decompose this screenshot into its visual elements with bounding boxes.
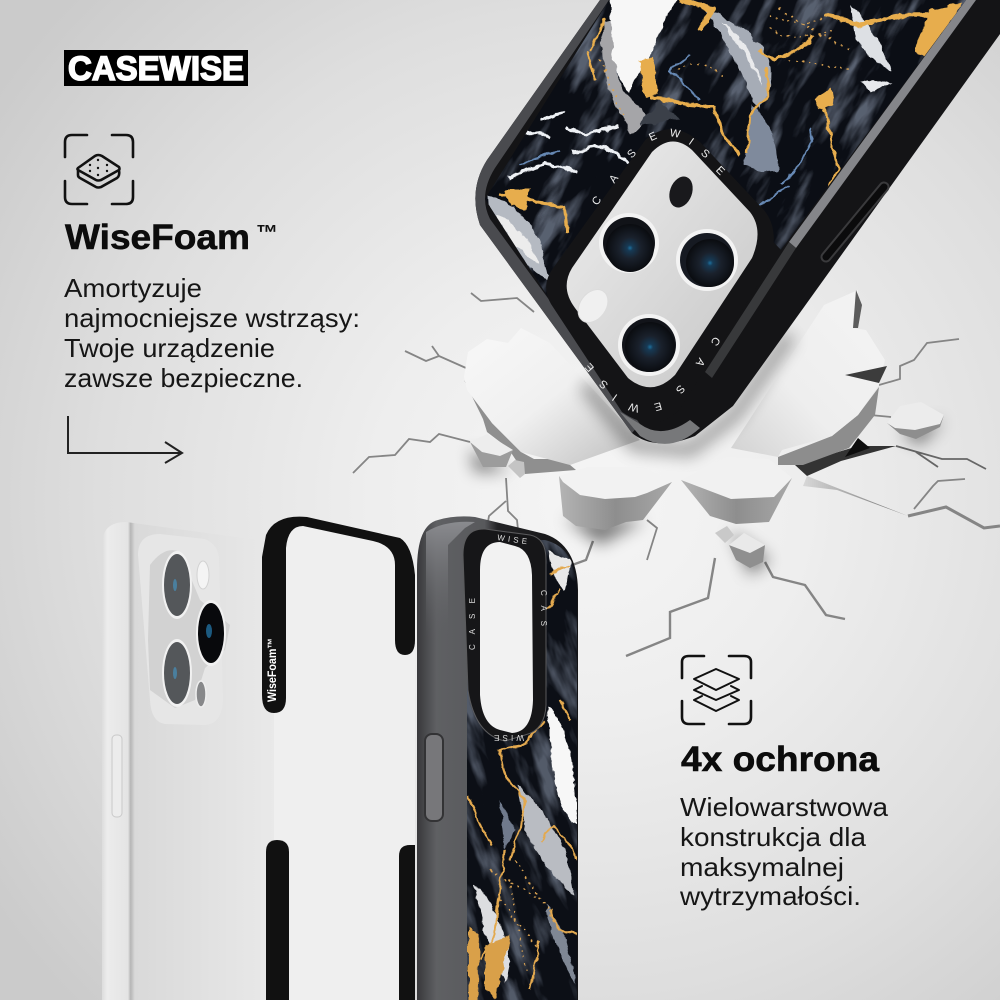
heading: 4x ochrona: 4x ochrona xyxy=(681,740,880,779)
text: 4x ochrona description: Wielowarstwowa xyxy=(680,792,889,822)
island brand text: C xyxy=(590,194,604,208)
white phone xyxy=(102,522,275,1000)
island brand text: I xyxy=(610,391,620,403)
island brand text: E xyxy=(653,399,663,413)
text: WiseFoam description xyxy=(64,273,360,393)
slab: left large xyxy=(464,328,640,474)
icon: layers in scan frame xyxy=(682,656,751,724)
strip label: WiseFoam™ xyxy=(265,638,279,702)
marble back xyxy=(485,0,966,295)
small debris xyxy=(715,526,765,568)
ring brand text: C A S E xyxy=(468,598,477,650)
island brand text: E xyxy=(713,164,727,178)
island brand text: A xyxy=(607,172,621,186)
camera plate xyxy=(138,534,223,725)
icon: foam pad in scan frame xyxy=(65,135,133,204)
transparent inner shell xyxy=(274,526,415,1000)
phone: impact phone in marble case xyxy=(475,0,1000,444)
island brand text: E xyxy=(583,360,597,374)
text: 4x ochrona description: konstrukcja dla xyxy=(680,822,867,852)
island brand text: S xyxy=(625,147,639,161)
heading: WiseFoam: ™ xyxy=(256,220,278,245)
marble back xyxy=(467,540,577,1000)
island brand text: W xyxy=(669,127,682,141)
case body xyxy=(475,0,1000,443)
lenses xyxy=(148,550,230,708)
foam strip lower left xyxy=(266,840,289,1000)
text: 4x ochrona description: wytrzymałości. xyxy=(679,881,861,911)
lenses xyxy=(572,173,738,376)
dark case side view xyxy=(417,516,578,1000)
logo: CASEWISE xyxy=(68,50,244,88)
camera plate xyxy=(567,141,758,387)
metal side highlight xyxy=(789,0,976,248)
WiseFoam foam strip xyxy=(262,517,415,713)
island brand text: W xyxy=(627,400,641,414)
slab: small right rock xyxy=(887,402,944,439)
island brand text: I xyxy=(686,136,696,148)
crack lines xyxy=(353,293,1000,656)
ring brand text: C A S xyxy=(539,590,548,626)
slab: small left rocks xyxy=(470,434,525,478)
slab: center left xyxy=(559,467,672,530)
heading: WiseFoam: WiseFoam xyxy=(65,218,250,257)
text: 4x ochrona description: maksymalnej xyxy=(680,852,844,882)
slab: right large xyxy=(731,290,908,516)
contact shadow xyxy=(585,335,790,450)
island brand text: S xyxy=(673,382,687,396)
text: WiseFoam description: Amortyzuje xyxy=(64,273,202,303)
ring brand text: W I S E xyxy=(497,533,528,546)
cracked wall impact xyxy=(353,290,1000,656)
slab: center right xyxy=(681,457,792,524)
island brand text: E xyxy=(647,130,659,144)
text: WiseFoam description: Twoje urządzenie xyxy=(64,333,275,363)
text: 4x ochrona description xyxy=(679,792,889,911)
ground shadows xyxy=(470,420,944,575)
island brand text: A xyxy=(693,356,707,369)
ring brand text xyxy=(468,533,548,742)
camera ring xyxy=(463,529,546,741)
side button xyxy=(112,735,122,817)
camera opening xyxy=(480,542,533,733)
island brand text: S xyxy=(698,147,712,161)
foam strip lower right xyxy=(399,845,415,1000)
text: WiseFoam description: najmocniejsze wstrząsy: xyxy=(64,303,360,333)
case wall xyxy=(417,516,578,1000)
ring brand text: W I S E xyxy=(494,733,524,742)
island brand text: S xyxy=(597,377,611,391)
text: WiseFoam description: zawsze bezpieczne. xyxy=(64,363,303,393)
island brand text xyxy=(583,127,727,414)
camera island xyxy=(546,129,774,423)
island brand text: C xyxy=(708,334,722,348)
side button xyxy=(826,187,884,257)
arrow xyxy=(68,416,182,463)
gold veins xyxy=(500,0,940,233)
side button xyxy=(425,734,443,821)
